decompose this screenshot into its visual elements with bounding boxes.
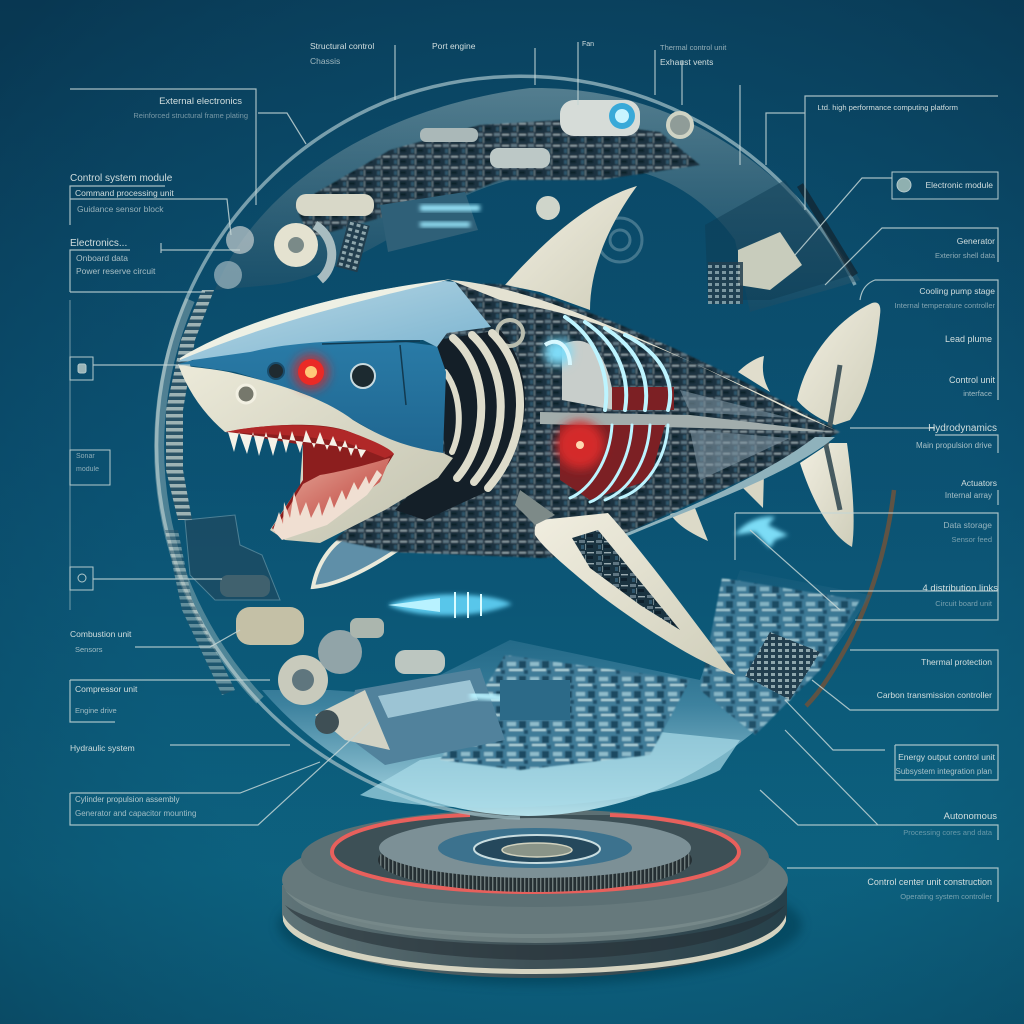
cyan lens glow — [544, 338, 572, 366]
left labels: Reinforced structural frame plating — [133, 111, 248, 120]
lower mouth — [274, 458, 390, 536]
pectoral fin big — [535, 513, 735, 675]
pedestal centre — [474, 835, 600, 863]
left labels: Power reserve circuit — [76, 266, 156, 276]
pedestal upper disc — [379, 818, 691, 878]
pedestal ridged tier — [378, 828, 692, 892]
pedestal blue ring — [438, 828, 632, 868]
right labels: Electronic module — [925, 180, 993, 190]
top labels: Thermal control unit — [660, 43, 727, 52]
cut-away gear — [497, 320, 523, 346]
left labels: Electronics... — [70, 238, 127, 249]
nostril — [237, 385, 255, 403]
right labels: Cooling pump stage — [919, 286, 995, 296]
right labels: Autonomous — [944, 811, 997, 822]
white lens cylinder — [420, 100, 692, 168]
mechanical body — [335, 283, 840, 558]
left labels: Compressor unit — [75, 684, 138, 694]
body top hull — [450, 280, 835, 430]
mouth interior — [226, 425, 394, 532]
glowing core upper — [562, 341, 615, 410]
panel seams — [322, 341, 420, 405]
left labels: Sensors — [75, 645, 103, 654]
top labels — [310, 41, 727, 67]
silver rear detail — [680, 390, 790, 480]
brown rim edge — [806, 490, 894, 706]
left labels: Control system module — [70, 173, 173, 184]
left labels: External electronics — [159, 96, 242, 107]
gears and beige cylinders — [220, 575, 445, 705]
right labels: Ltd. high performance computing platform — [817, 103, 958, 112]
right labels: Thermal protection — [921, 657, 992, 667]
anal fins — [670, 472, 764, 541]
cream ribs — [445, 333, 520, 488]
top labels: Chassis — [310, 56, 340, 66]
right labels: Energy output control unit — [898, 752, 996, 762]
red upper ribs fill — [612, 387, 674, 410]
eye socket left — [268, 363, 284, 379]
right labels: Control center unit construction — [867, 877, 992, 887]
upper gum — [226, 425, 394, 458]
upper machinery band — [214, 88, 860, 312]
second dorsal fin — [738, 356, 770, 392]
right labels: Circuit board unit — [935, 599, 993, 608]
lower teeth — [273, 470, 382, 540]
right labels: Carbon transmission controller — [877, 690, 992, 700]
lower chest section — [338, 490, 510, 553]
right labels: Lead plume — [945, 334, 992, 344]
top labels: Fan — [582, 41, 594, 48]
upper teeth — [228, 430, 366, 458]
spine — [540, 412, 835, 432]
top cream edge — [180, 279, 452, 360]
right labels: 4 distribution links — [922, 583, 998, 594]
left labels: Combustion unit — [70, 629, 132, 639]
small pectoral fin left — [313, 535, 400, 587]
leader lines — [70, 42, 998, 902]
right labels: Generator — [957, 236, 995, 246]
red reactor lower — [556, 421, 665, 500]
label icons — [70, 172, 998, 590]
right labels: Hydrodynamics — [928, 423, 997, 434]
pedestal red ring — [332, 815, 739, 892]
right labels: Control unit — [949, 375, 995, 385]
lower tail fin — [800, 443, 854, 547]
left labels: Sonar — [76, 453, 95, 460]
right labels: Main propulsion drive — [916, 441, 993, 450]
left labels: module — [76, 466, 99, 473]
left labels: Engine drive — [75, 706, 117, 715]
right labels: Processing cores and data — [903, 828, 993, 837]
upper right mechanism — [536, 180, 855, 304]
sphere rim — [157, 76, 855, 818]
left labels: Generator and capacitor mounting — [75, 809, 196, 818]
right labels: interface — [963, 389, 992, 398]
dark blue side plate — [178, 335, 446, 453]
right labels: Actuators — [961, 478, 997, 488]
top labels: Exhaust vents — [660, 57, 713, 67]
red eye — [293, 354, 329, 390]
top labels: Port engine — [432, 41, 476, 51]
cream face — [178, 364, 453, 543]
hologram fish — [388, 592, 512, 618]
right labels — [817, 103, 998, 901]
left labels — [70, 96, 248, 818]
right labels: Exterior shell data — [935, 251, 996, 260]
large blue cylinder — [315, 668, 570, 765]
dorsal fin — [505, 186, 637, 310]
lower machinery bowl — [185, 515, 870, 816]
body lower hull — [560, 437, 835, 558]
grid panel — [745, 632, 820, 700]
shark — [178, 186, 880, 675]
pedestal — [278, 809, 802, 985]
right labels: Sensor feed — [952, 535, 992, 544]
light blue head top plate — [178, 281, 491, 362]
glass sphere — [157, 76, 894, 818]
rim ladder detail — [165, 290, 235, 695]
top labels: Structural control — [310, 41, 374, 51]
cyan glowing ribs — [565, 317, 670, 502]
right labels: Internal temperature controller — [895, 301, 996, 310]
right labels: Data storage — [943, 520, 992, 530]
left labels: Onboard data — [76, 253, 128, 263]
left schematic panel — [185, 515, 280, 600]
upper tail fin — [797, 302, 880, 425]
left labels: Hydraulic system — [70, 743, 135, 753]
right labels: Subsystem integration plan — [896, 767, 992, 776]
hologram manta — [735, 517, 788, 548]
sensor right — [351, 364, 375, 388]
blue glow unit — [380, 192, 480, 252]
shoulder joint — [515, 490, 555, 525]
right labels: Internal array — [945, 491, 992, 500]
right labels: Operating system controller — [900, 892, 993, 901]
left labels: Guidance sensor block — [77, 204, 164, 214]
left labels: Command processing unit — [75, 188, 174, 198]
left cylinder and gears — [214, 194, 374, 289]
left labels: Cylinder propulsion assembly — [75, 795, 180, 804]
internal dark gill cavity — [395, 330, 525, 520]
tail fin spars — [826, 365, 840, 510]
